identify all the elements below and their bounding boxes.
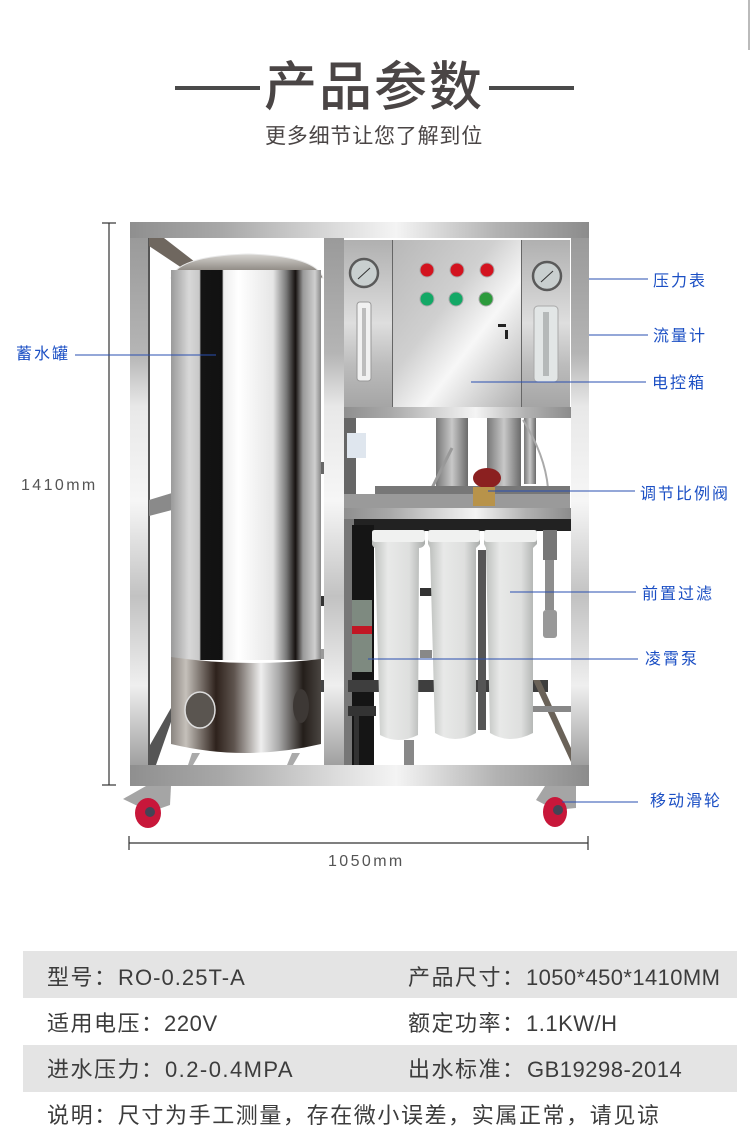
inlet pressure: 0.2-0.4MPA <box>165 1057 294 1082</box>
product size: 产品尺寸： <box>408 965 526 990</box>
width dimension: 1050mm <box>328 853 405 870</box>
title <box>175 58 574 117</box>
subtitle: 更多细节让您了解到位 <box>265 125 483 148</box>
title: 产品参数 <box>264 58 484 117</box>
edge tick <box>748 0 750 50</box>
callout: flow meter: 流量计 <box>653 327 707 345</box>
rated power: 1.1KW/H <box>526 1011 618 1036</box>
note: 说明：尺寸为手工测量，存在微小误差，实属正常，请见谅 <box>47 1103 661 1128</box>
inlet pressure: 进水压力： <box>47 1057 165 1082</box>
callout: flow meter <box>589 327 707 345</box>
callout: pressure gauge <box>589 272 707 290</box>
flow meters <box>357 302 558 382</box>
callout: caster: 移动滑轮 <box>650 792 722 810</box>
lower compartment with pump <box>344 519 571 765</box>
casters <box>123 786 576 828</box>
callout: pressure gauge: 压力表 <box>653 272 707 290</box>
callout: booster pump: 凌霄泵 <box>645 650 699 668</box>
product size: 1050*450*1410MM <box>526 965 720 990</box>
upper piping compartment <box>344 407 571 519</box>
callout: pre-filter: 前置过滤 <box>642 585 714 603</box>
rated power: 额定功率： <box>408 1011 526 1036</box>
outlet standard: 出水标准： <box>408 1057 526 1082</box>
voltage: 220V <box>164 1011 218 1036</box>
callout: storage tank: 蓄水罐 <box>16 345 70 363</box>
pressure gauges <box>350 259 561 290</box>
filter housings <box>372 530 537 740</box>
door lock <box>498 324 506 327</box>
callout: ratio valve: 调节比例阀 <box>640 485 730 503</box>
indicator lamps <box>420 263 494 306</box>
pressure tank <box>171 254 323 765</box>
height dimension: 1410mm <box>21 477 98 494</box>
outlet standard: GB19298-2014 <box>527 1057 682 1082</box>
frame <box>130 222 589 786</box>
model: RO-0.25T-A <box>118 965 246 990</box>
model: 型号： <box>47 965 118 990</box>
equipment illustration <box>123 222 589 828</box>
specification table <box>23 951 737 1092</box>
control panel <box>344 240 570 407</box>
voltage: 适用电压： <box>47 1011 165 1036</box>
callout: control box: 电控箱 <box>652 374 706 392</box>
